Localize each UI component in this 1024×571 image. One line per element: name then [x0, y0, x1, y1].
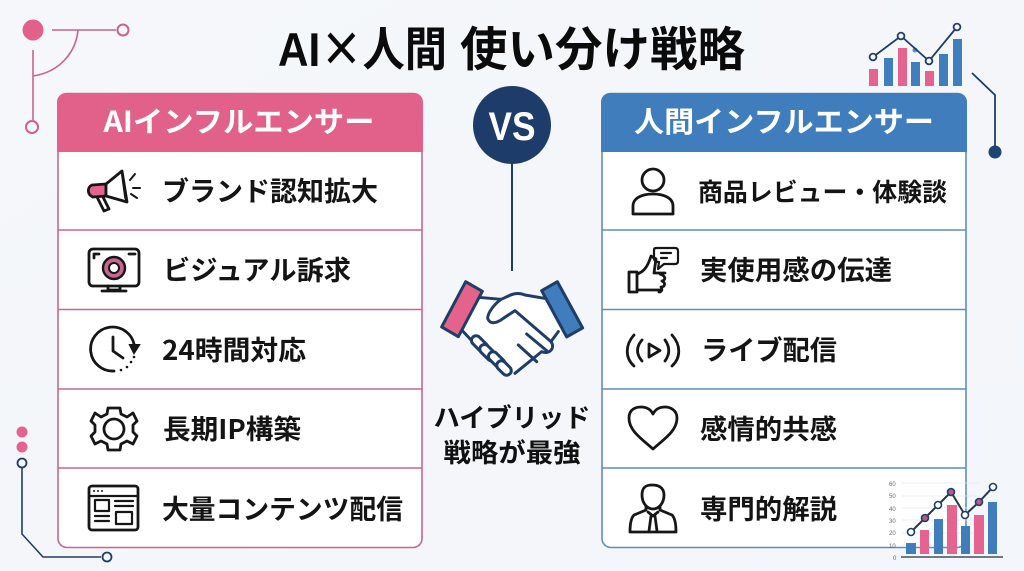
heading: AI influencer: AIインフルエンサー	[102, 99, 374, 141]
icon: handshake	[442, 282, 583, 377]
icon: thumbs up with speech bubble	[629, 248, 678, 292]
item: visual appeal: ビジュアル訴求	[163, 249, 351, 288]
icon: web content	[89, 486, 138, 530]
panel: AI influencer	[57, 93, 423, 548]
chart: bottom-right bars and line: 60	[889, 482, 896, 488]
callout: hybrid strategy: 戦略が最強	[444, 433, 580, 470]
chart: bottom-right bars and line	[889, 482, 1003, 562]
decoration: right connector	[972, 73, 1002, 158]
item: empathy: 感情的共感	[700, 408, 837, 447]
connector: VS to handshake	[511, 160, 513, 271]
chart: bottom-right bars and line: 0	[893, 556, 897, 562]
title: AI×人間	[278, 11, 447, 80]
icon: monitor with lens	[89, 249, 139, 291]
title: 使い分け戦略	[460, 23, 745, 76]
icon: gear	[91, 408, 137, 450]
panel header: human influencer	[601, 93, 967, 152]
item: mass content: 大量コンテンツ配信	[162, 488, 403, 527]
icon: live stream	[627, 335, 679, 366]
badge: VS	[473, 86, 551, 164]
chart: bottom-right bars and line: 40	[889, 507, 896, 513]
icon: person	[633, 169, 673, 214]
item: live: ライブ配信	[701, 329, 837, 368]
chart: top-right bars and line	[869, 24, 962, 86]
item: long-term IP: 長期IP構築	[163, 408, 301, 447]
badge: VS: VS	[488, 105, 536, 149]
item: reviews: 商品レビュー・体験談	[698, 173, 947, 209]
icon: business person	[630, 485, 676, 532]
callout: hybrid strategy: ハイブリッド	[434, 398, 590, 435]
chart: bottom-right bars and line: 20	[889, 531, 896, 537]
heading: human influencer: 人間インフルエンサー	[634, 99, 934, 141]
decoration: top-left circuit	[22, 20, 128, 133]
item: expert: 専門的解説	[700, 488, 837, 527]
chart: bottom-right bars and line: 50	[889, 494, 896, 500]
icon: heart	[629, 407, 677, 449]
title	[278, 11, 745, 80]
callout: hybrid strategy	[434, 398, 590, 470]
panel: human influencer	[601, 93, 967, 548]
icon: megaphone	[88, 171, 140, 211]
chart: bottom-right bars and line: 30	[889, 519, 896, 525]
item: real use: 実使用感の伝達	[700, 249, 892, 288]
panel header: AI influencer	[57, 93, 423, 152]
decoration: bottom-left connector	[16, 426, 112, 562]
item: 24 hours: 24時間対応	[162, 329, 306, 368]
icon: clock	[91, 327, 139, 371]
chart: bottom-right bars and line: 10	[889, 544, 896, 550]
item: brand awareness: ブランド認知拡大	[162, 170, 378, 209]
